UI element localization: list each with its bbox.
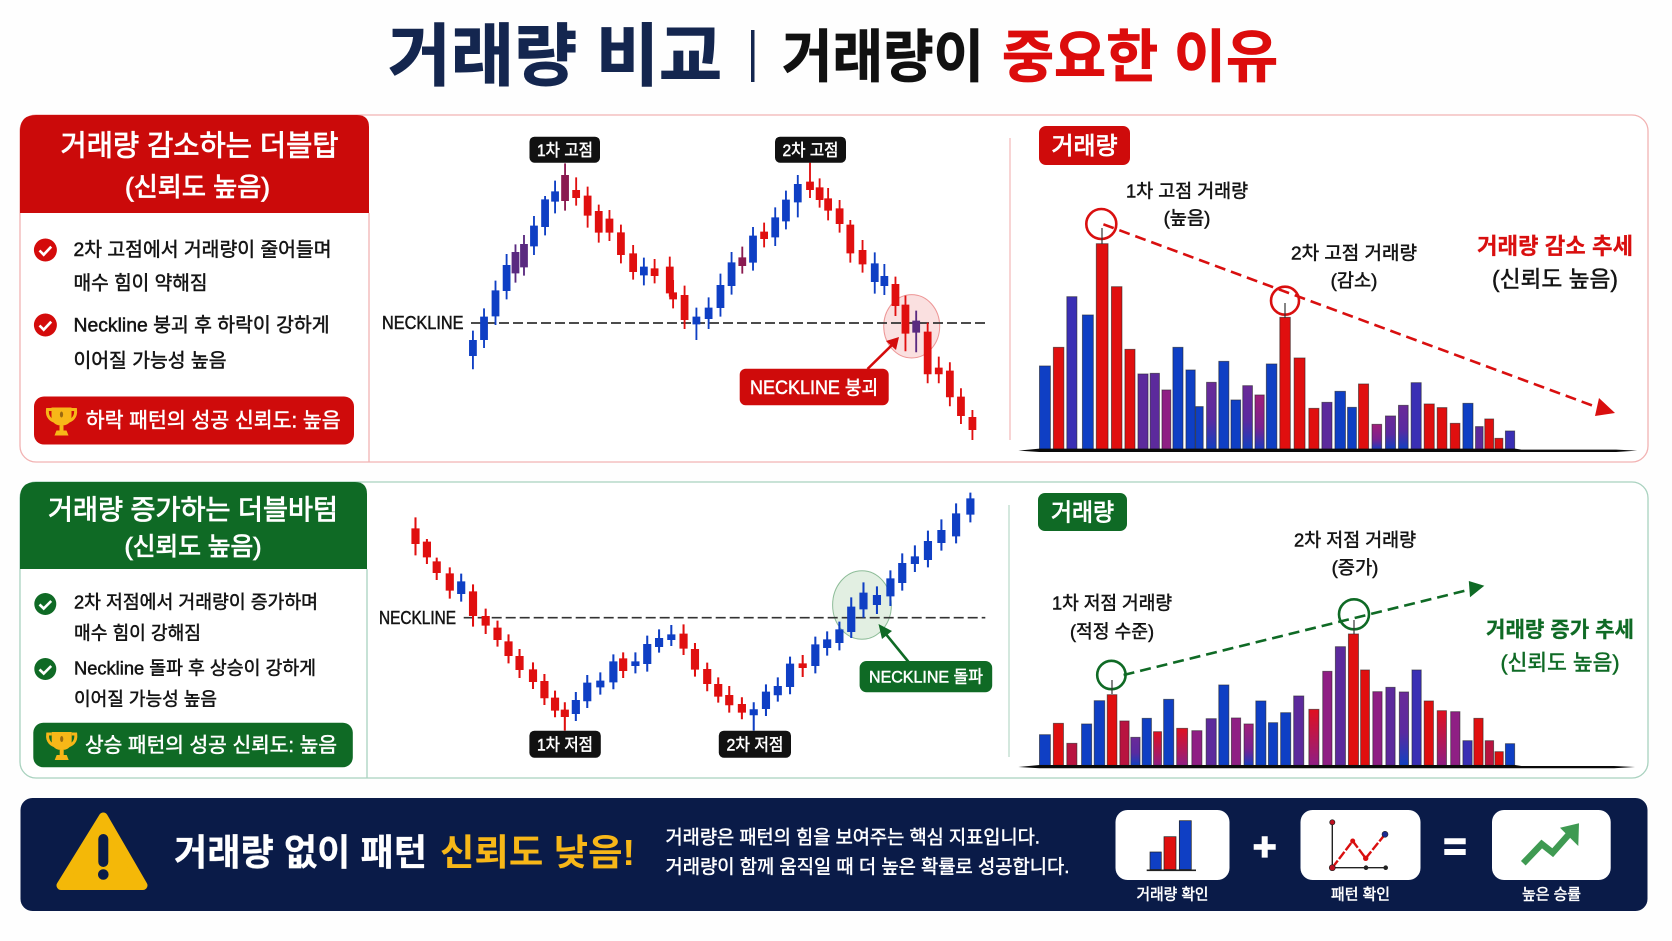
text block: point 1: 매수 힘이 강해짐	[74, 623, 201, 644]
label: second trough volume: (증가)	[1332, 557, 1378, 578]
badge: neckline breakout: NECKLINE 돌파	[869, 668, 983, 687]
arrow: volume decreasing trend	[1103, 224, 1615, 416]
panel header: double bottom: 거래량 증가하는 더블바텀	[48, 494, 338, 525]
text block: point 2: Neckline 돌파 후 상승이 강하게	[74, 658, 316, 679]
icon card: pattern check	[1300, 810, 1420, 880]
candlesticks	[415, 493, 970, 731]
panel: double bottom with increasing volume	[20, 482, 1648, 778]
label: second peak volume: (감소)	[1331, 270, 1377, 291]
caption: pattern check: 패턴 확인	[1331, 886, 1390, 904]
icon: warning triangle	[61, 817, 143, 886]
badge: neckline break: NECKLINE 붕괴	[750, 377, 878, 399]
label: first peak volume: (높음)	[1164, 208, 1210, 228]
panel header: double top	[20, 115, 369, 213]
icon: trophy	[48, 732, 76, 760]
label: increasing trend	[1486, 618, 1634, 675]
label: first trough volume	[1052, 593, 1172, 642]
label: increasing trend: (신뢰도 높음)	[1500, 651, 1620, 675]
label: first peak volume: 1차 고점 거래량	[1126, 181, 1248, 202]
text block: point 2: Neckline 붕괴 후 하락이 강하게	[74, 314, 330, 336]
arrow: volume increasing trend	[1124, 581, 1484, 675]
icon card: high win rate	[1492, 810, 1611, 880]
caption: volume check: 거래량 확인	[1136, 886, 1208, 904]
bar chart: decreasing volume	[1018, 209, 1637, 452]
text block: point 1	[74, 592, 318, 644]
neckline label: NECKLINE	[382, 313, 464, 333]
callout circle: neckline break zone	[884, 295, 940, 358]
callout circle: neckline breakout zone	[833, 571, 891, 639]
title: 거래량이	[782, 26, 984, 88]
chart: double bottom candlesticks	[379, 493, 992, 758]
label: decreasing trend: (신뢰도 높음)	[1492, 266, 1618, 292]
badge: neckline break	[740, 369, 889, 405]
label: first trough: 1차 저점	[537, 736, 593, 754]
label: second peak volume: 2차 고점 거래량	[1291, 243, 1417, 264]
label: second trough: 2차 저점	[726, 736, 784, 754]
label: first trough volume: (적정 수준)	[1070, 621, 1154, 642]
icon: check 2	[34, 314, 57, 336]
headline: 거래량 없이 패턴	[174, 832, 427, 873]
candlesticks	[473, 163, 972, 440]
chart: double top candlesticks	[382, 137, 985, 440]
icon: check 2	[34, 658, 56, 680]
text block: explanation	[666, 826, 1070, 878]
text block: point 1: 매수 힘이 약해짐	[74, 273, 208, 295]
callout: success reliability	[34, 396, 354, 444]
headline	[174, 832, 635, 873]
marker: second trough circle	[1339, 599, 1369, 634]
label: second peak: 2차 고점	[782, 141, 838, 160]
badge: neckline breakout	[860, 661, 992, 692]
neckline label: NECKLINE	[379, 608, 456, 628]
label: second trough volume: 2차 저점 거래량	[1294, 530, 1416, 551]
panel header: double top: 거래량 감소하는 더블탑	[60, 130, 338, 162]
icon: plus	[1254, 836, 1276, 858]
headline: 신뢰도 낮음!	[440, 832, 635, 873]
icon: check 1	[34, 593, 56, 615]
arrow: to neckline break	[868, 337, 899, 369]
label: second peak volume	[1291, 243, 1417, 291]
text block: explanation: 거래량이 함께 움직일 때 더 높은 확률로 성공합니다.	[666, 856, 1070, 878]
text block: point 1: 2차 저점에서 거래량이 증가하며	[74, 592, 318, 612]
title: 중요한 이유	[1002, 26, 1278, 88]
callout: success reliability: 상승 패턴의 성공 신뢰도: 높음	[85, 734, 337, 757]
label: second trough volume	[1294, 530, 1416, 578]
icon: trophy	[47, 408, 76, 436]
text block: point 1: 2차 고점에서 거래량이 줄어들며	[74, 239, 332, 261]
bar chart: increasing volume	[1018, 581, 1635, 768]
text block: point 2	[74, 314, 330, 372]
label: second trough	[719, 731, 791, 758]
marker: first peak circle	[1086, 209, 1116, 244]
panel header: double bottom	[20, 482, 367, 569]
icon: check 1	[34, 238, 57, 262]
title	[388, 19, 1278, 95]
label: decreasing trend: 거래량 감소 추세	[1477, 234, 1633, 259]
label: decreasing trend	[1477, 234, 1633, 292]
caption: high win rate: 높은 승률	[1522, 886, 1581, 904]
volume badge	[1039, 126, 1130, 165]
text block: explanation: 거래량은 패턴의 힘을 보여주는 핵심 지표입니다.	[666, 826, 1040, 848]
panel header: double bottom: (신뢰도 높음)	[124, 533, 262, 561]
icon: equals	[1444, 838, 1466, 855]
text block: point 2	[74, 658, 316, 710]
callout: success reliability	[33, 723, 353, 767]
text block: point 2: 이어질 가능성 높음	[74, 350, 226, 372]
volume badge: 거래량	[1051, 500, 1114, 526]
marker: second peak circle	[1271, 287, 1299, 318]
panel: double top with decreasing volume	[20, 115, 1648, 462]
marker: first trough circle	[1097, 661, 1126, 694]
callout: success reliability: 하락 패턴의 성공 신뢰도: 높음	[86, 410, 341, 432]
icon card: volume check	[1116, 810, 1230, 880]
text block: point 2: 이어질 가능성 높음	[74, 689, 217, 710]
text block: point 1	[74, 239, 332, 295]
arrow: to neckline breakout	[878, 624, 909, 662]
panel: bottom banner	[20, 798, 1648, 911]
label: first trough volume: 1차 저점 거래량	[1052, 593, 1172, 614]
panel header: double top: (신뢰도 높음)	[125, 172, 270, 202]
label: first peak	[530, 137, 600, 163]
label: first peak volume	[1126, 181, 1248, 228]
label: increasing trend: 거래량 증가 추세	[1486, 618, 1634, 642]
label: first peak: 1차 고점	[537, 141, 593, 160]
label: second peak	[775, 137, 846, 163]
title: 거래량 비교	[388, 19, 722, 95]
volume badge: 거래량	[1052, 133, 1118, 160]
volume badge	[1038, 493, 1127, 531]
label: first trough	[529, 731, 601, 758]
